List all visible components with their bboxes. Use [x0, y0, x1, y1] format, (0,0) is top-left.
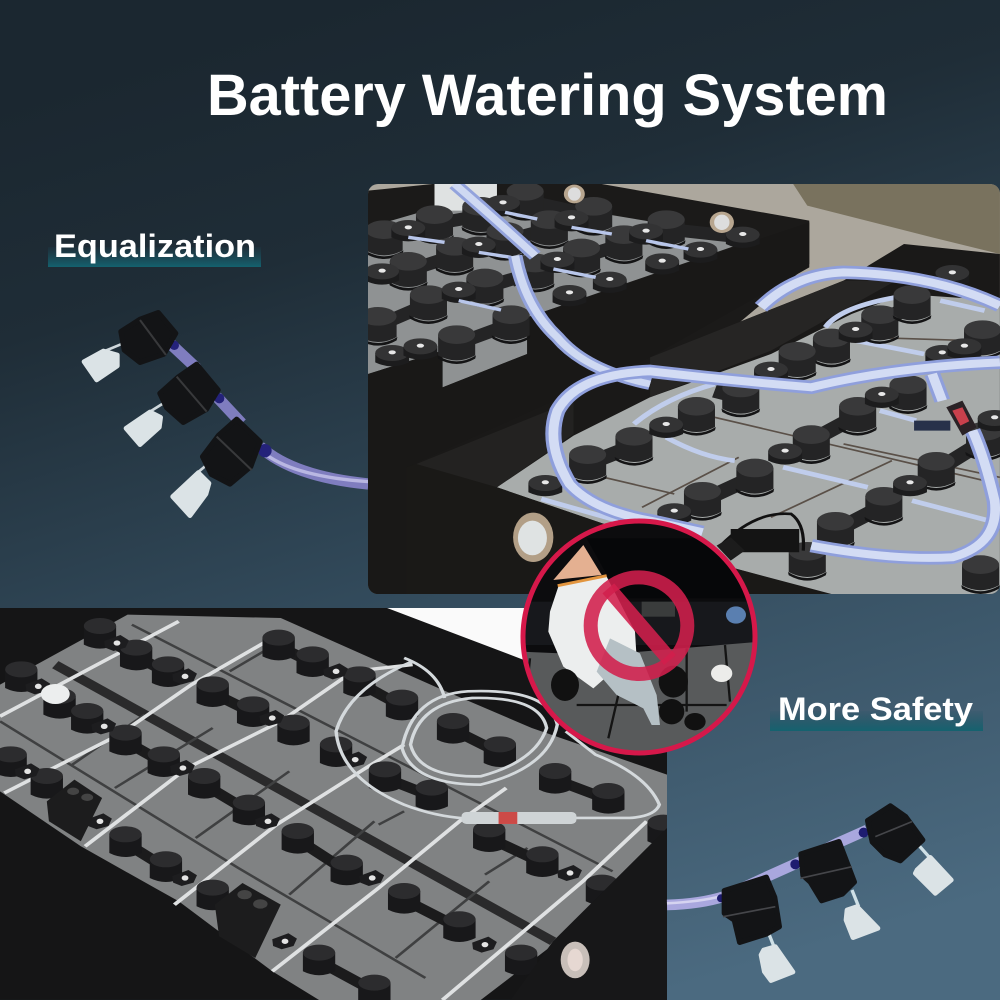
crate wall shadow [368, 222, 809, 594]
callout ring [523, 521, 755, 753]
label: Equalization: Equalization [54, 228, 256, 264]
black channel [55, 665, 553, 941]
white background [387, 608, 524, 660]
arm [553, 545, 602, 580]
rear crate caps [359, 182, 760, 366]
cell seams [604, 337, 1000, 517]
battery caps [551, 666, 706, 730]
glass strip [642, 602, 675, 617]
floor seams [527, 645, 730, 738]
bottle [597, 638, 660, 725]
icon: safety valves [667, 806, 951, 981]
battery caps [0, 618, 680, 1000]
orange cuff [558, 576, 607, 586]
blue disc [726, 606, 746, 624]
rear thin tubes [408, 212, 688, 310]
photo: battery crates with tubes [359, 182, 1000, 594]
front thin tubes [541, 297, 989, 521]
callout: no pouring water [520, 521, 760, 753]
flow indicator [462, 812, 576, 824]
front battery crate [406, 244, 1000, 594]
prohibition sign [591, 577, 687, 674]
rivets [564, 185, 734, 233]
cell deck [0, 615, 667, 1000]
tray wall right [547, 828, 667, 950]
glove [548, 577, 637, 688]
rear battery crate [368, 184, 809, 594]
front crate rivet [513, 513, 553, 562]
white tubes [0, 621, 647, 1000]
rivet [561, 942, 590, 978]
icon: equalization valves [84, 313, 368, 516]
concrete block [793, 184, 1000, 254]
main loop tubes [553, 272, 1000, 558]
white cap [711, 665, 732, 682]
floor [520, 642, 760, 752]
label: More Safety: More Safety [778, 691, 973, 727]
cell seams [0, 625, 613, 978]
photo: battery tray top view [0, 608, 680, 1000]
title: Battery Watering System [207, 63, 888, 128]
white cap [41, 684, 70, 704]
tray brackets [47, 780, 281, 958]
rear tube [455, 184, 650, 384]
flow indicator [914, 401, 977, 436]
dark upper backdrop [520, 602, 760, 645]
front crate caps [528, 265, 1000, 594]
clear tube loop [336, 658, 659, 819]
connector [717, 514, 803, 561]
sleeve [587, 538, 747, 598]
